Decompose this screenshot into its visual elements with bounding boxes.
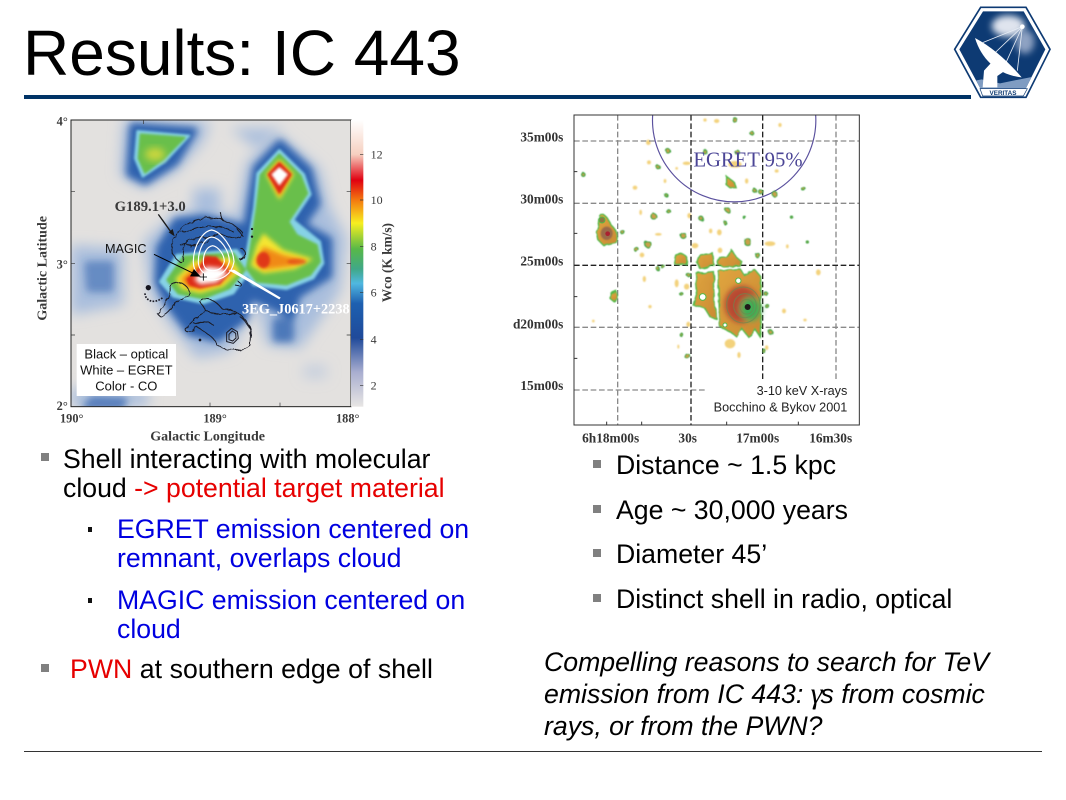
axis labels: Galactic Latitude [35, 216, 50, 321]
legend box: White – EGRET [80, 363, 173, 378]
axis labels: 2 [371, 379, 377, 393]
sub-bullet: MAGIC emission: cloud [117, 614, 181, 644]
axis tick labels: 25m00s [520, 253, 563, 268]
left bullet list [41, 444, 469, 684]
grid lines [574, 115, 859, 425]
axis tick labels: 16m30s [809, 430, 852, 445]
bullet: shell interacting [41, 444, 445, 503]
faint yellow speckle [592, 118, 821, 358]
axis labels: 4° [57, 115, 68, 129]
sub-bullet: EGRET emission: remnant, overlaps cloud [117, 543, 402, 573]
x-ray blobs [596, 177, 761, 337]
x-ray caption: Bocchino & Bykov 2001 [714, 401, 847, 415]
axis labels: 190° [60, 411, 83, 425]
small knots [582, 118, 808, 359]
map frame [71, 120, 351, 407]
EGRET contours [193, 230, 234, 280]
axis tick labels: 17m00s [736, 430, 779, 445]
bullet: age: Age ~ 30,000 years [616, 495, 848, 525]
optical contours [157, 212, 252, 350]
bullet: shell interacting: Shell interacting with molecular [63, 444, 430, 474]
sub-bullet: EGRET emission [88, 514, 469, 573]
heat map colour layers [71, 120, 351, 407]
footer rule [24, 751, 1042, 752]
callout arrow: MAGIC [154, 254, 193, 273]
axis labels: G189.1+3.0 [115, 199, 186, 215]
axis tick labels: 30s [678, 430, 697, 445]
axis labels: 4 [371, 332, 377, 346]
bullet: diameter: Diameter 45’ [616, 539, 767, 569]
axis labels: Wco (K km/s) [380, 223, 395, 302]
sub-bullet: EGRET emission: EGRET emission centered on [117, 514, 469, 544]
axis labels: 3° [57, 257, 68, 271]
callout arrow: 3EG [228, 270, 281, 299]
icon: VERITAS logo [954, 6, 1051, 98]
closing statement [544, 647, 991, 741]
axis labels: 189° [203, 411, 227, 425]
icon: VERITAS logo: VERITAS [990, 90, 1016, 97]
chart: X-ray map of IC 443 [513, 114, 860, 445]
axis labels: 3EG_J0617+2238 [242, 301, 350, 317]
sub-bullet: MAGIC emission [88, 585, 465, 644]
legend box: Black – optical [84, 347, 168, 362]
axis tick labels: d20m00s [513, 316, 563, 331]
right bullet list [593, 450, 952, 614]
chart: CO map of IC 443 [35, 115, 395, 445]
plot frame [574, 115, 859, 425]
title: Results: IC 443 [23, 17, 461, 89]
closing statement: Compelling reasons to search for TeV [544, 647, 989, 677]
axis labels: 6 [371, 286, 377, 300]
axis labels [35, 115, 395, 445]
bullet: shell: Distinct shell in radio, optical [616, 584, 952, 614]
axis labels: 188° [336, 411, 359, 425]
axis labels: 10 [371, 193, 383, 207]
legend box [77, 344, 176, 396]
axis tick labels: 6h18m00s [582, 430, 639, 445]
bullet: distance: Distance ~ 1.5 kpc [616, 450, 836, 480]
axis tick labels: 15m00s [520, 378, 563, 393]
axis tick labels: 30m00s [520, 191, 563, 206]
colour bar [351, 120, 363, 407]
callout arrow: G189 [158, 214, 173, 234]
bullet: shell interacting: cloud -> potential target material [63, 473, 445, 503]
EGRET 95 percent contour [652, 115, 816, 202]
closing statement: rays, or from the PWN? [544, 711, 822, 741]
x-ray core [724, 286, 761, 323]
axis labels: Galactic Longitude [150, 430, 265, 445]
x-ray caption [707, 382, 853, 415]
axis tick labels [513, 130, 852, 445]
legend box: Color - CO [95, 379, 157, 394]
EGRET label: EGRET 95% [693, 149, 803, 171]
bullet: PWN: PWN at southern edge of shell [70, 654, 433, 684]
axis labels: 12 [371, 147, 383, 161]
axis labels: 2° [57, 399, 68, 413]
sub-bullet: MAGIC emission: MAGIC emission centered on [117, 585, 465, 615]
cross marker [200, 273, 207, 281]
MAGIC label: MAGIC [105, 242, 146, 256]
title rule [24, 95, 971, 99]
axis labels: 8 [371, 240, 377, 254]
x-ray caption: 3-10 keV X-rays [757, 384, 847, 398]
axis tick labels: 35m00s [520, 130, 563, 145]
closing statement: emission from IC 443: γs from cosmic [544, 677, 985, 710]
